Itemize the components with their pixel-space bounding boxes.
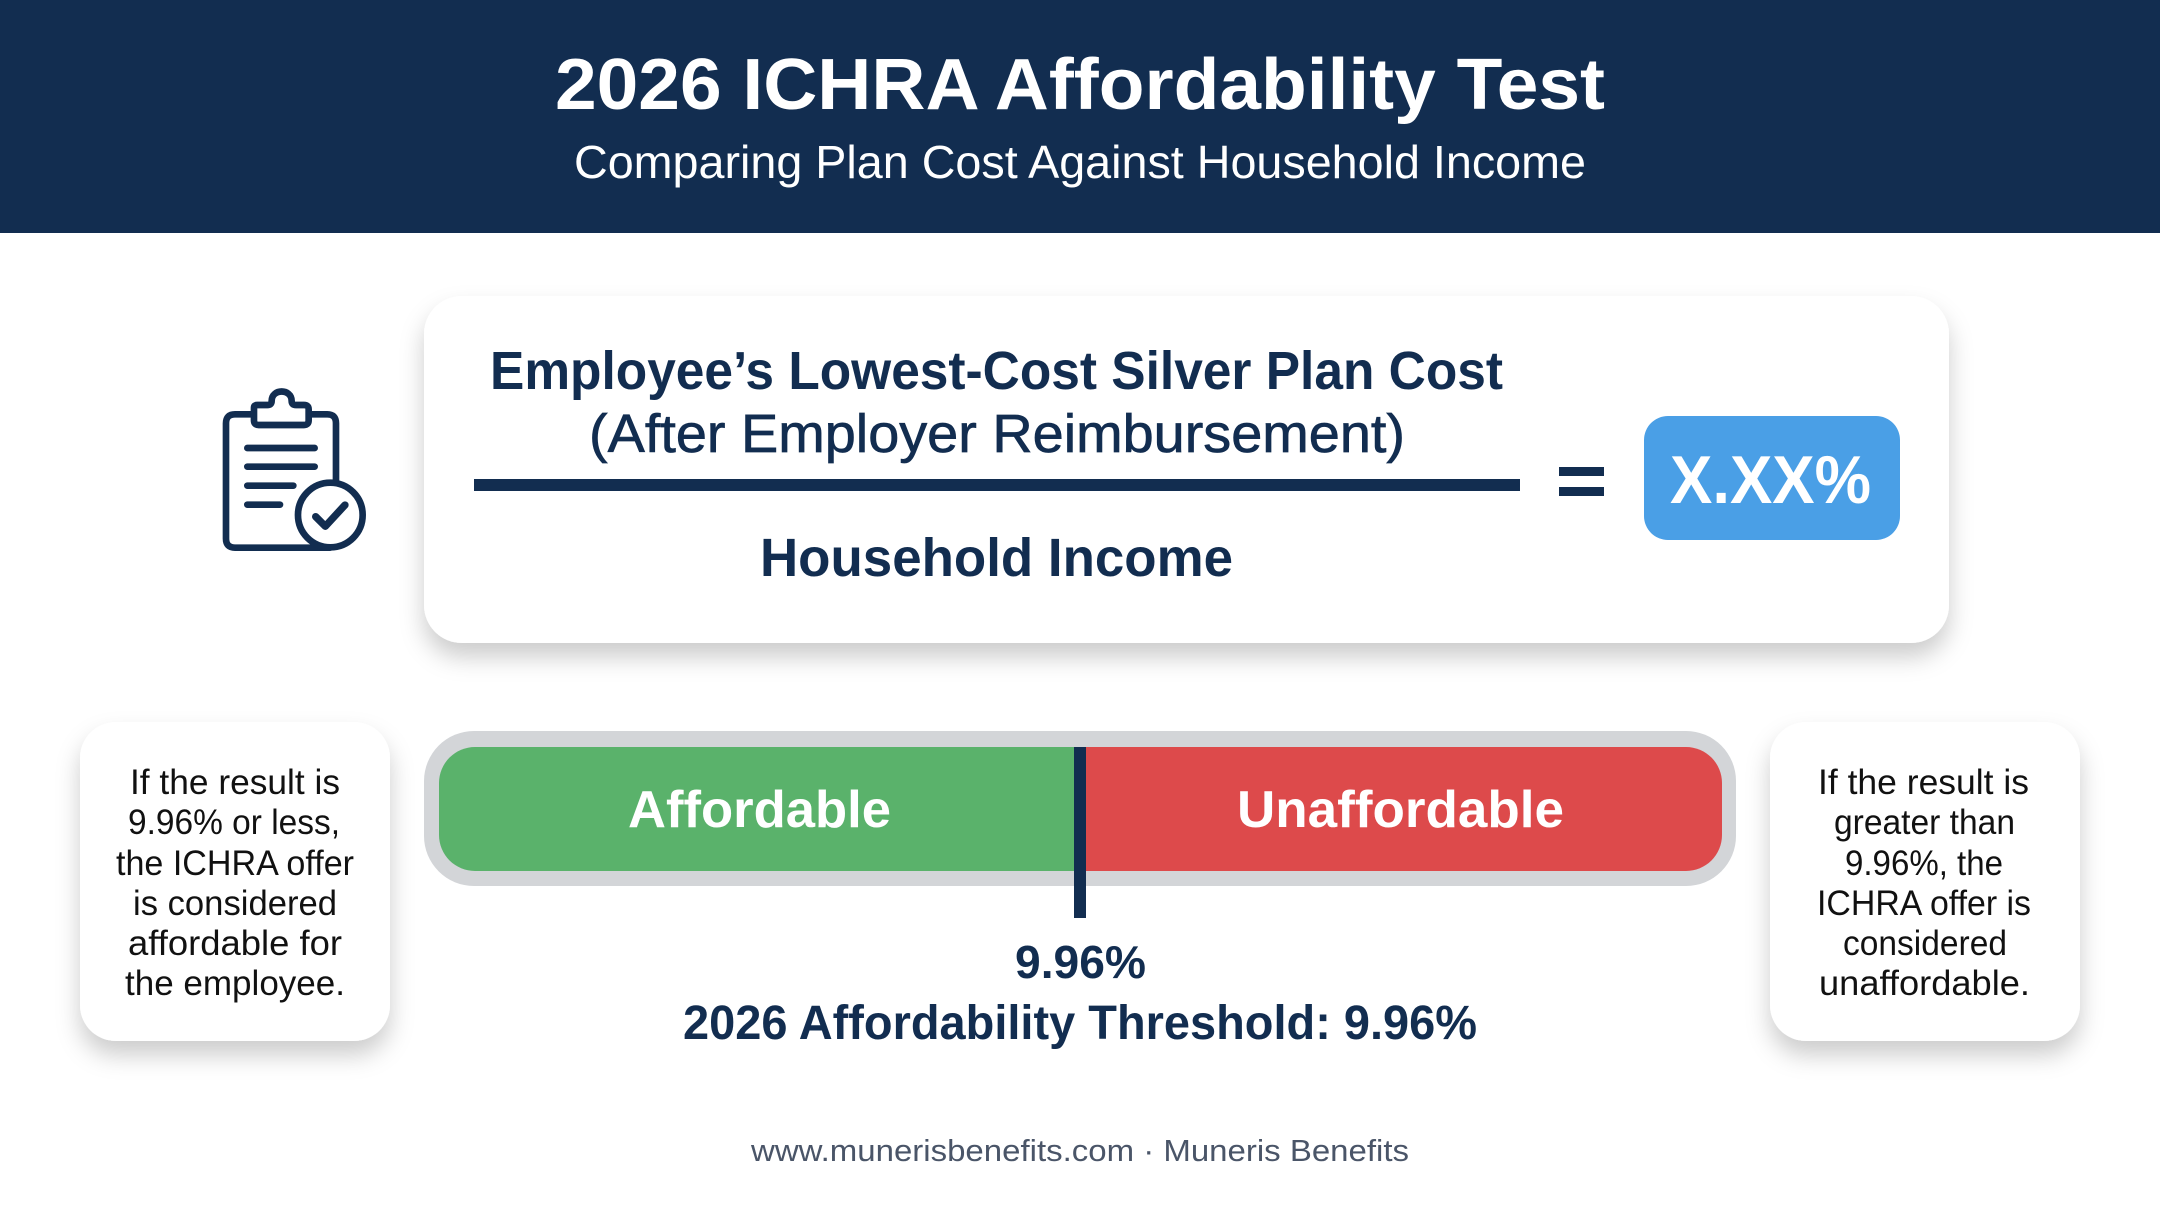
panel: right explanation card: 9.96%, the: [1845, 844, 2003, 883]
denominator: Household Income: [760, 528, 1233, 588]
panel: right explanation card: greater than: [1834, 803, 2015, 842]
fraction bar: [474, 479, 1520, 491]
threshold marker: [1074, 747, 1086, 918]
panel: right explanation card: considered: [1843, 924, 2007, 963]
numerator: Employee’s Lowest-Cost Silver Plan Cost: [490, 341, 1503, 401]
panel: right explanation card: unaffordable.: [1819, 964, 2030, 1003]
panel: left explanation card: the employee.: [125, 964, 345, 1003]
label: affordable: Affordable: [628, 781, 891, 839]
numerator: (After Employer Reimbursement): [589, 404, 1405, 464]
header banner: [0, 0, 2160, 233]
panel: right explanation card: If the result is: [1818, 763, 2029, 802]
affordability gauge bar: [424, 731, 1736, 918]
threshold caption: 2026 Affordability Threshold: 9.96%: [683, 997, 1477, 1050]
panel: left explanation card: affordable for: [128, 924, 342, 963]
panel: formula card: [424, 296, 1949, 643]
footer: www.munerisbenefits.com · Muneris Benefits: [750, 1133, 1409, 1168]
result pill: [1644, 416, 1900, 540]
panel: right explanation card: [1770, 722, 2080, 1041]
threshold value: 9.96%: [1015, 936, 1146, 988]
panel: left explanation card: the ICHRA offer: [116, 844, 354, 883]
panel: right explanation card: ICHRA offer is: [1817, 884, 2031, 923]
icon: clipboard with check: [226, 391, 363, 548]
panel: left explanation card: 9.96% or less,: [128, 803, 340, 842]
subtitle: Comparing Plan Cost Against Household Income: [574, 136, 1586, 188]
numerator: [490, 341, 1503, 464]
panel: left explanation card: is considered: [133, 884, 337, 923]
label: unaffordable: Unaffordable: [1237, 781, 1564, 839]
result pill: X.XX%: [1670, 442, 1871, 518]
title: 2026 ICHRA Affordability Test: [555, 45, 1605, 125]
panel: left explanation card: If the result is: [130, 763, 340, 802]
equals sign: [1559, 467, 1604, 496]
panel: left explanation card: [80, 722, 390, 1041]
